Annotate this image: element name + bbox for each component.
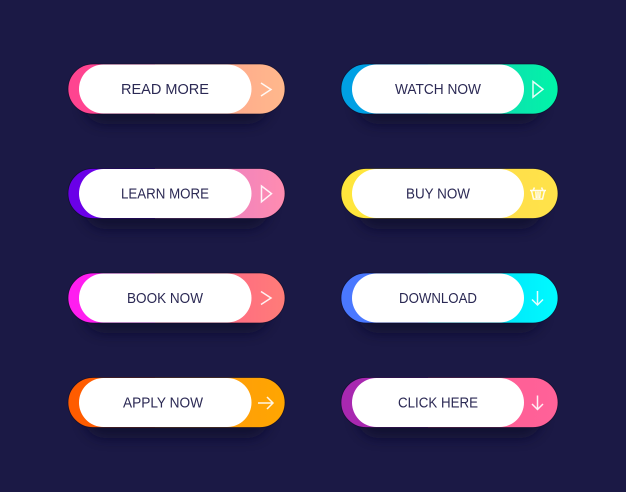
button: download bbox=[341, 273, 558, 333]
button: read more bbox=[68, 64, 285, 124]
button: buy now: BUY NOW bbox=[406, 186, 470, 202]
button: watch now bbox=[341, 64, 558, 124]
button: watch now: WATCH NOW bbox=[395, 82, 481, 98]
icon: basket bbox=[530, 188, 546, 199]
icon: play triangle bbox=[533, 82, 543, 97]
icon: chevron right bbox=[261, 83, 271, 96]
button: click here: CLICK HERE bbox=[398, 396, 478, 412]
button: learn more: LEARN MORE bbox=[121, 186, 209, 202]
button: apply now bbox=[68, 378, 285, 438]
button: apply now: APPLY NOW bbox=[123, 396, 203, 412]
button: download: DOWNLOAD bbox=[399, 291, 477, 307]
button: buy now bbox=[341, 168, 558, 229]
button: book now bbox=[68, 273, 285, 333]
button: read more: READ MORE bbox=[121, 82, 209, 98]
icon: arrow down bbox=[532, 396, 543, 410]
icon: chevron right bbox=[261, 292, 271, 304]
icon: play triangle bbox=[262, 186, 272, 202]
button: click here bbox=[341, 378, 558, 438]
icon: arrow down bbox=[532, 291, 543, 305]
icon: arrow right bbox=[258, 397, 273, 409]
button: learn more bbox=[68, 168, 285, 229]
button: book now: BOOK NOW bbox=[127, 291, 203, 307]
